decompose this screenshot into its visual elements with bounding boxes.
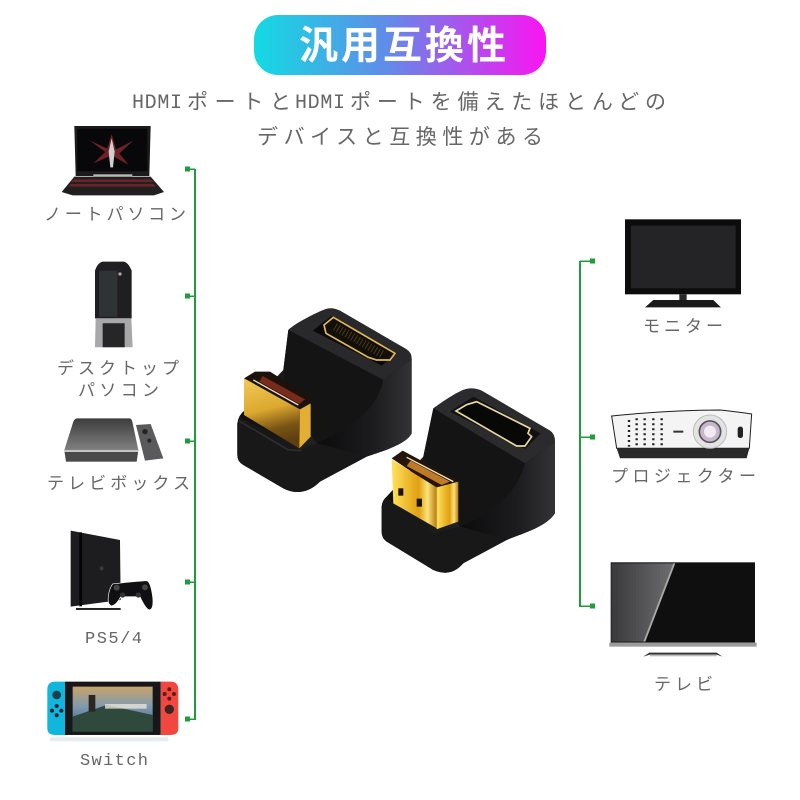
left connector bracket: [185, 166, 196, 722]
product: left HDMI adapter: [237, 308, 412, 492]
label: desktop PC: デスクトップ: [57, 358, 179, 380]
intro text: HDMI: [132, 92, 182, 115]
adapter body: [237, 308, 412, 492]
intro text: [132, 91, 666, 151]
label: PS5/4: PS5/4: [85, 630, 142, 649]
label: desktop PC: パソコン: [78, 382, 159, 402]
label: monitor: モニター: [643, 317, 723, 338]
title pill: [254, 15, 546, 75]
intro text: デバイスと互換性がある: [257, 126, 543, 151]
intro text: ポートと: [187, 91, 291, 116]
device: Switch: [47, 682, 178, 741]
intro text: HDMI: [295, 92, 345, 115]
plug: [244, 372, 311, 410]
device: monitor: [625, 219, 741, 307]
title text: 汎用互換性: [299, 15, 506, 71]
adapter body: [382, 388, 555, 573]
label: Switch: Switch: [80, 752, 148, 771]
device: television: [609, 562, 757, 657]
label: laptop: ノートパソコン: [44, 206, 186, 226]
label: projector: プロジェクター: [611, 467, 756, 488]
plug: [392, 451, 457, 488]
label: TV box: テレビボックス: [47, 474, 190, 495]
socket: [450, 397, 541, 449]
device: TV box: [64, 418, 163, 462]
device: PlayStation: [71, 531, 153, 610]
device: laptop: [62, 126, 164, 195]
right connector bracket: [579, 258, 595, 608]
device: desktop tower: [95, 262, 133, 347]
device: projector: [612, 410, 752, 458]
intro text: ポートを備えたほとんどの: [350, 91, 666, 116]
product: right HDMI adapter: [382, 388, 555, 573]
label: desktop PC: [57, 358, 179, 402]
label: television: テレビ: [654, 675, 713, 696]
socket: [313, 316, 397, 366]
